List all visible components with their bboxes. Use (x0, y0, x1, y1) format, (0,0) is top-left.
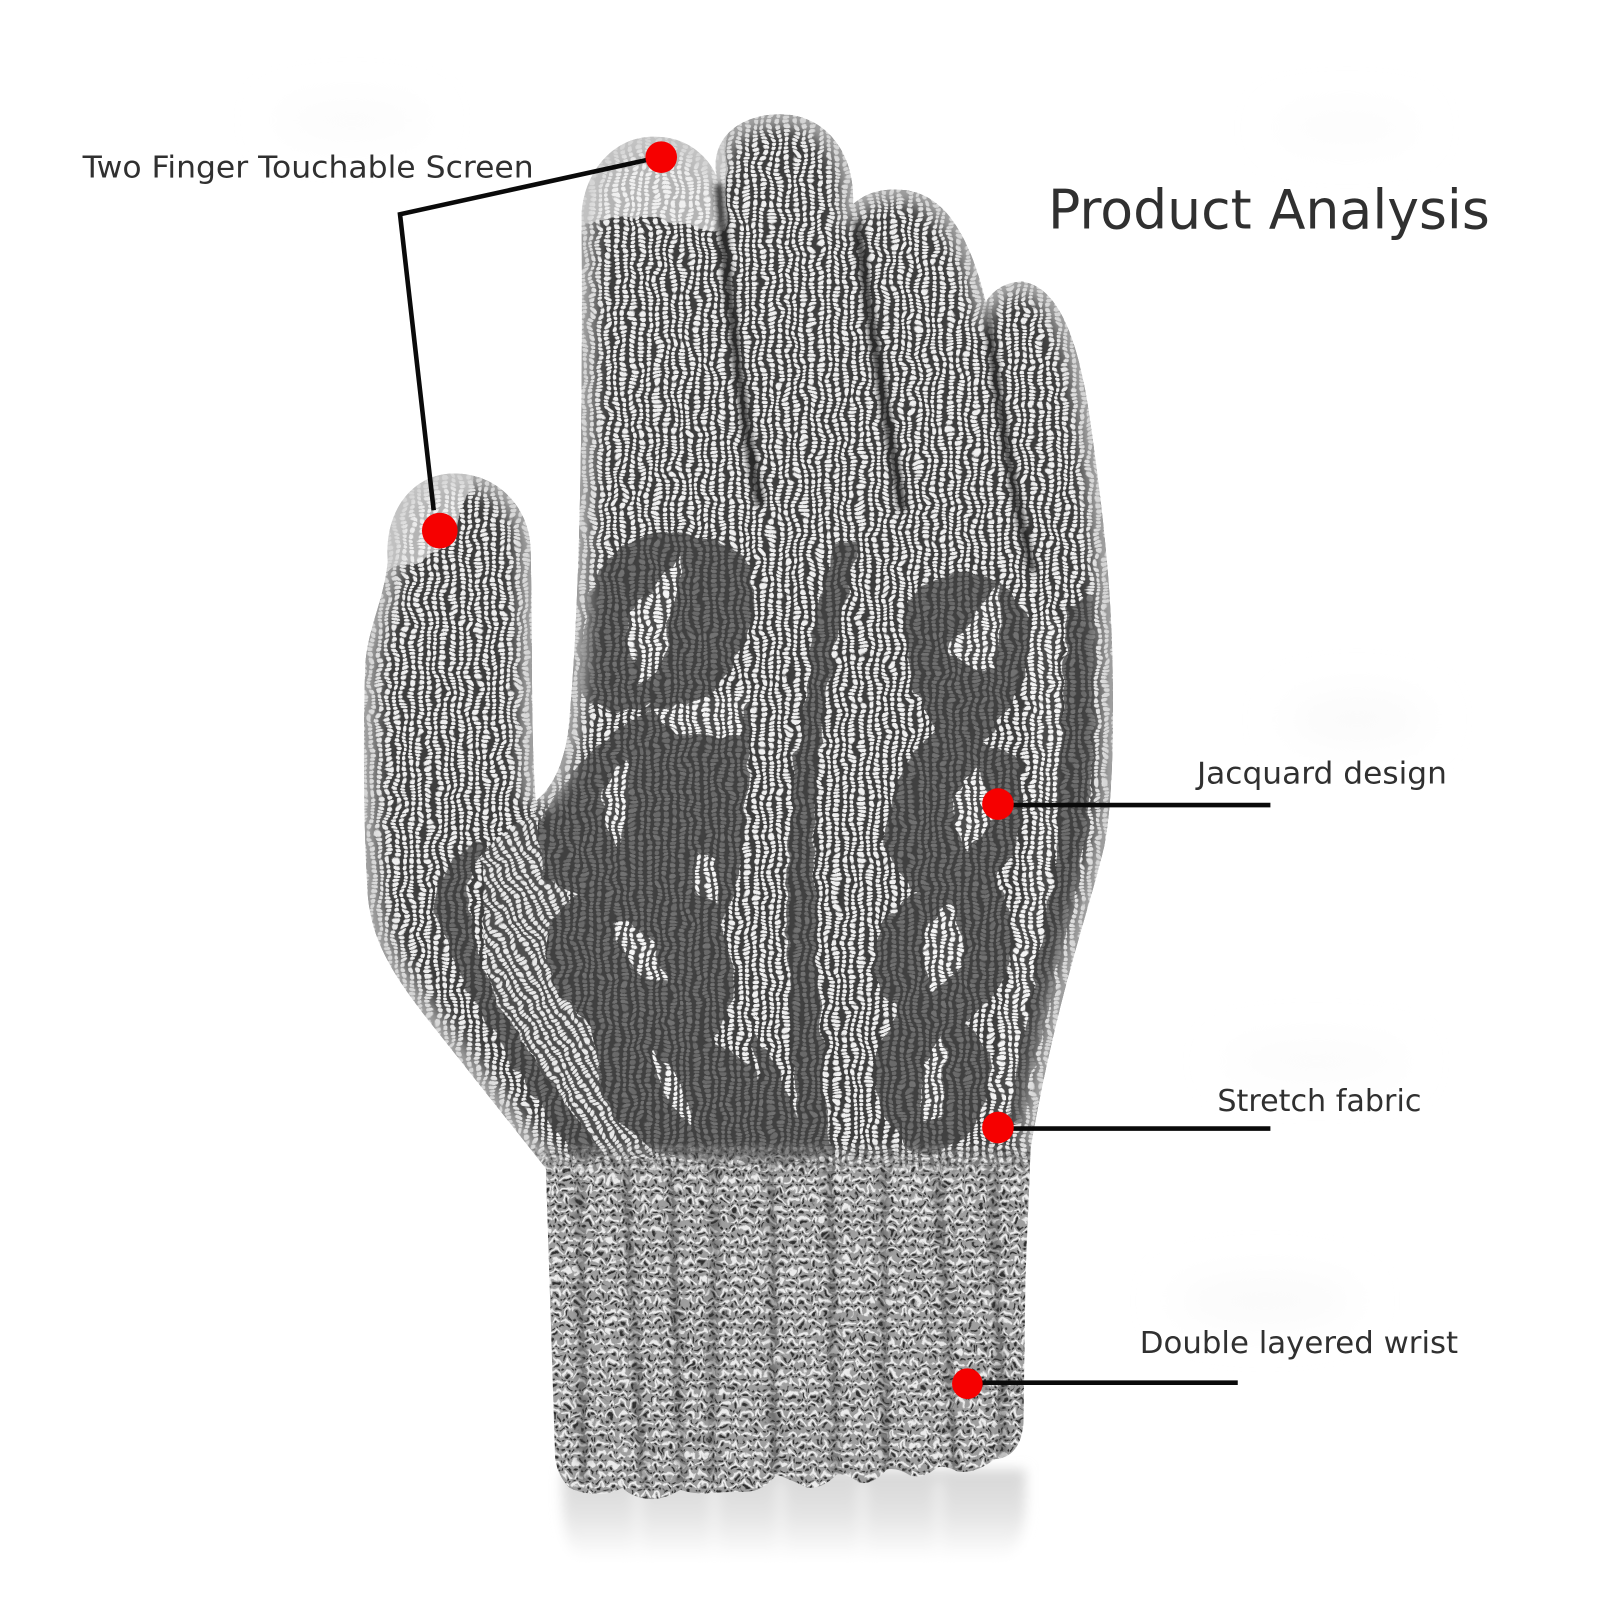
glove reflection (563, 1469, 1026, 1561)
title: Product Analysis (1048, 179, 1490, 242)
glove (337, 92, 1143, 1520)
glove base knit (337, 92, 1143, 1214)
touch tip: index finger (582, 134, 728, 232)
leader line: jacquard design (1005, 803, 1270, 807)
jacquard pattern: right panels (872, 573, 1031, 1155)
finger gap shadows (718, 184, 1033, 571)
marker: index fingertip (645, 141, 677, 173)
leader line: touch screen fingers (400, 158, 655, 510)
cuff ribs (578, 1163, 1002, 1490)
knit and jacquard body (337, 92, 1143, 1214)
dark vertical stripes (435, 543, 1094, 1163)
palm heel knit (480, 806, 653, 1158)
inner light band on palm (993, 612, 1061, 1117)
knitted cuff (528, 1142, 1031, 1500)
touch tip: thumb (386, 474, 474, 570)
outer edge soft highlight (364, 114, 1113, 1168)
label: double layered wrist: Double layered wrist (1140, 1326, 1458, 1361)
marker: jacquard design (982, 788, 1014, 820)
label: two finger touchable screen: Two Finger Touchable Screen (82, 151, 534, 186)
jacquard pattern: left panels (539, 535, 778, 1163)
marker: double layered wrist (952, 1368, 983, 1399)
marker: thumb tip (422, 513, 458, 548)
label: stretch fabric: Stretch fabric (1217, 1084, 1421, 1119)
infographic canvas (82, 114, 1488, 1546)
leader line: double layered wrist (974, 1380, 1238, 1385)
faint background smudges (276, 106, 1429, 1323)
label: jacquard design: Jacquard design (1195, 757, 1447, 792)
marker: stretch fabric (982, 1112, 1014, 1143)
leader line: stretch fabric (1005, 1126, 1270, 1131)
light knit patches inside jacquard (601, 556, 1001, 1133)
